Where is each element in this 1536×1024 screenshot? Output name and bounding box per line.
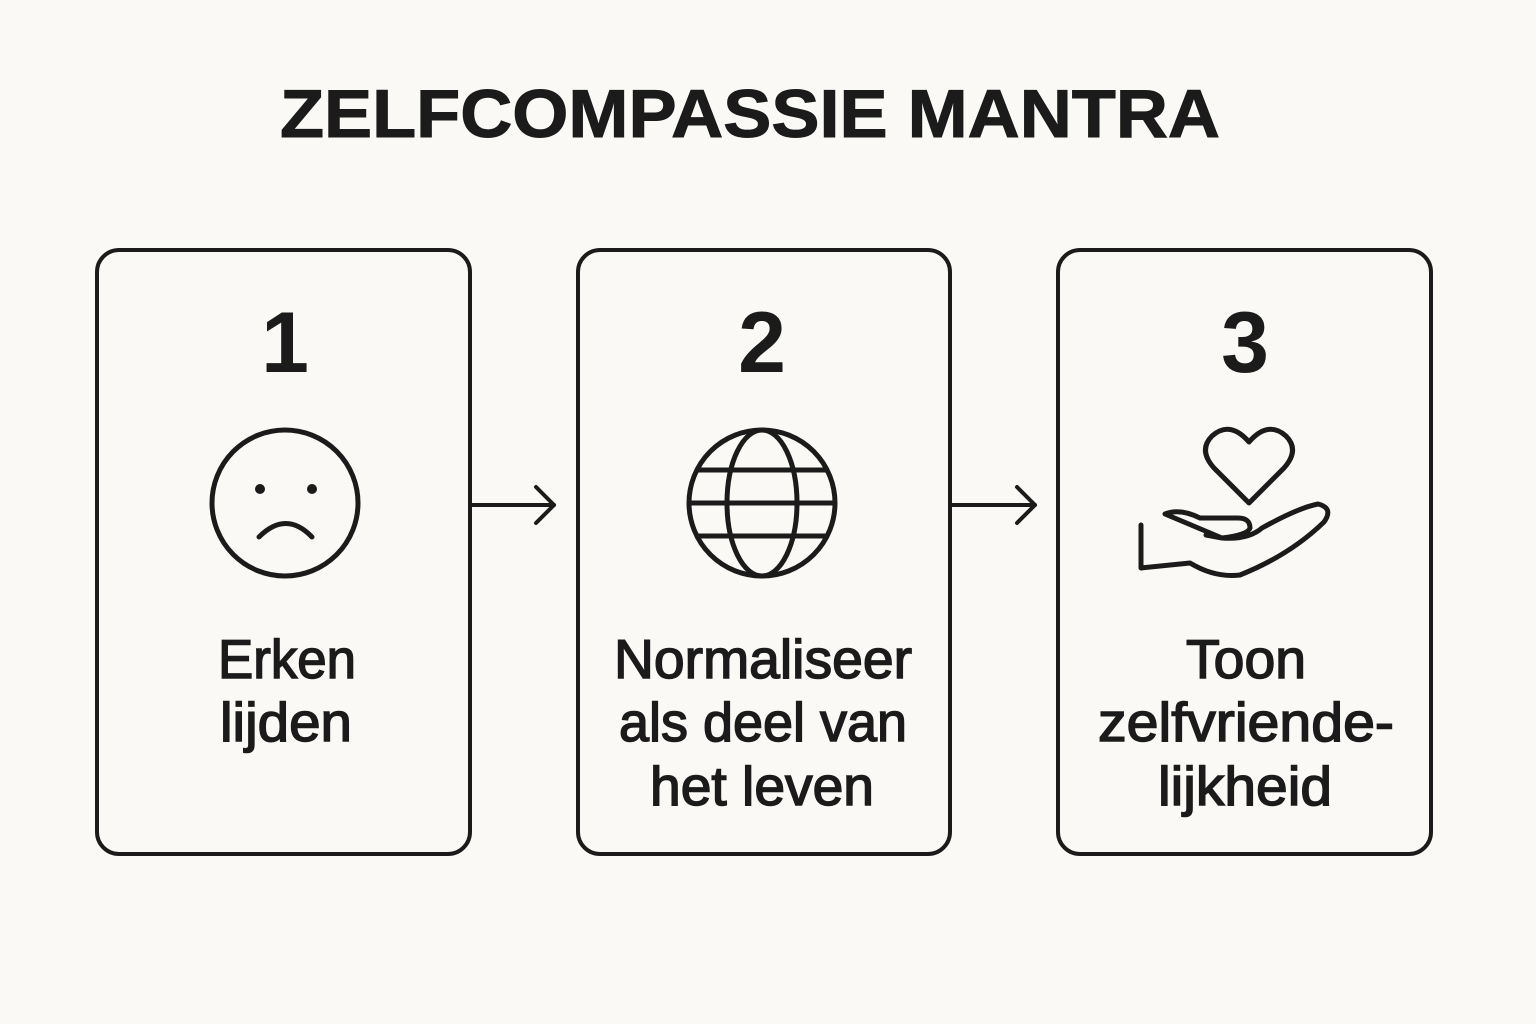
arrow 2 [952, 487, 1035, 523]
number 1: 1 [261, 295, 309, 391]
arrow 1 [472, 487, 554, 523]
title: ZELFCOMPASSIE MANTRA [280, 76, 1220, 152]
text: step 1 label: lijden [220, 691, 352, 753]
panel: step 2 [578, 250, 950, 854]
icon: sad face [212, 430, 358, 576]
panel: step 3 [1058, 250, 1431, 854]
text: step 1 label [218, 628, 356, 753]
number 2: 2 [738, 295, 786, 391]
number 3: 3 [1221, 295, 1269, 391]
text: step 2 label: als deel van [619, 691, 907, 753]
text: step 3 label: zelfvriende- [1098, 691, 1394, 753]
panel: step 1 [97, 250, 470, 854]
text: step 3 label: lijkheid [1158, 755, 1332, 817]
icon: hand with heart [1141, 429, 1328, 576]
text: step 2 label [614, 628, 912, 817]
text: step 3 label [1098, 628, 1394, 817]
text: step 3 label: Toon [1186, 628, 1306, 690]
text: step 2 label: het leven [650, 755, 874, 817]
text: step 1 label: Erken [218, 628, 356, 690]
icon: globe [689, 430, 835, 576]
text: step 2 label: Normaliseer [614, 628, 912, 690]
